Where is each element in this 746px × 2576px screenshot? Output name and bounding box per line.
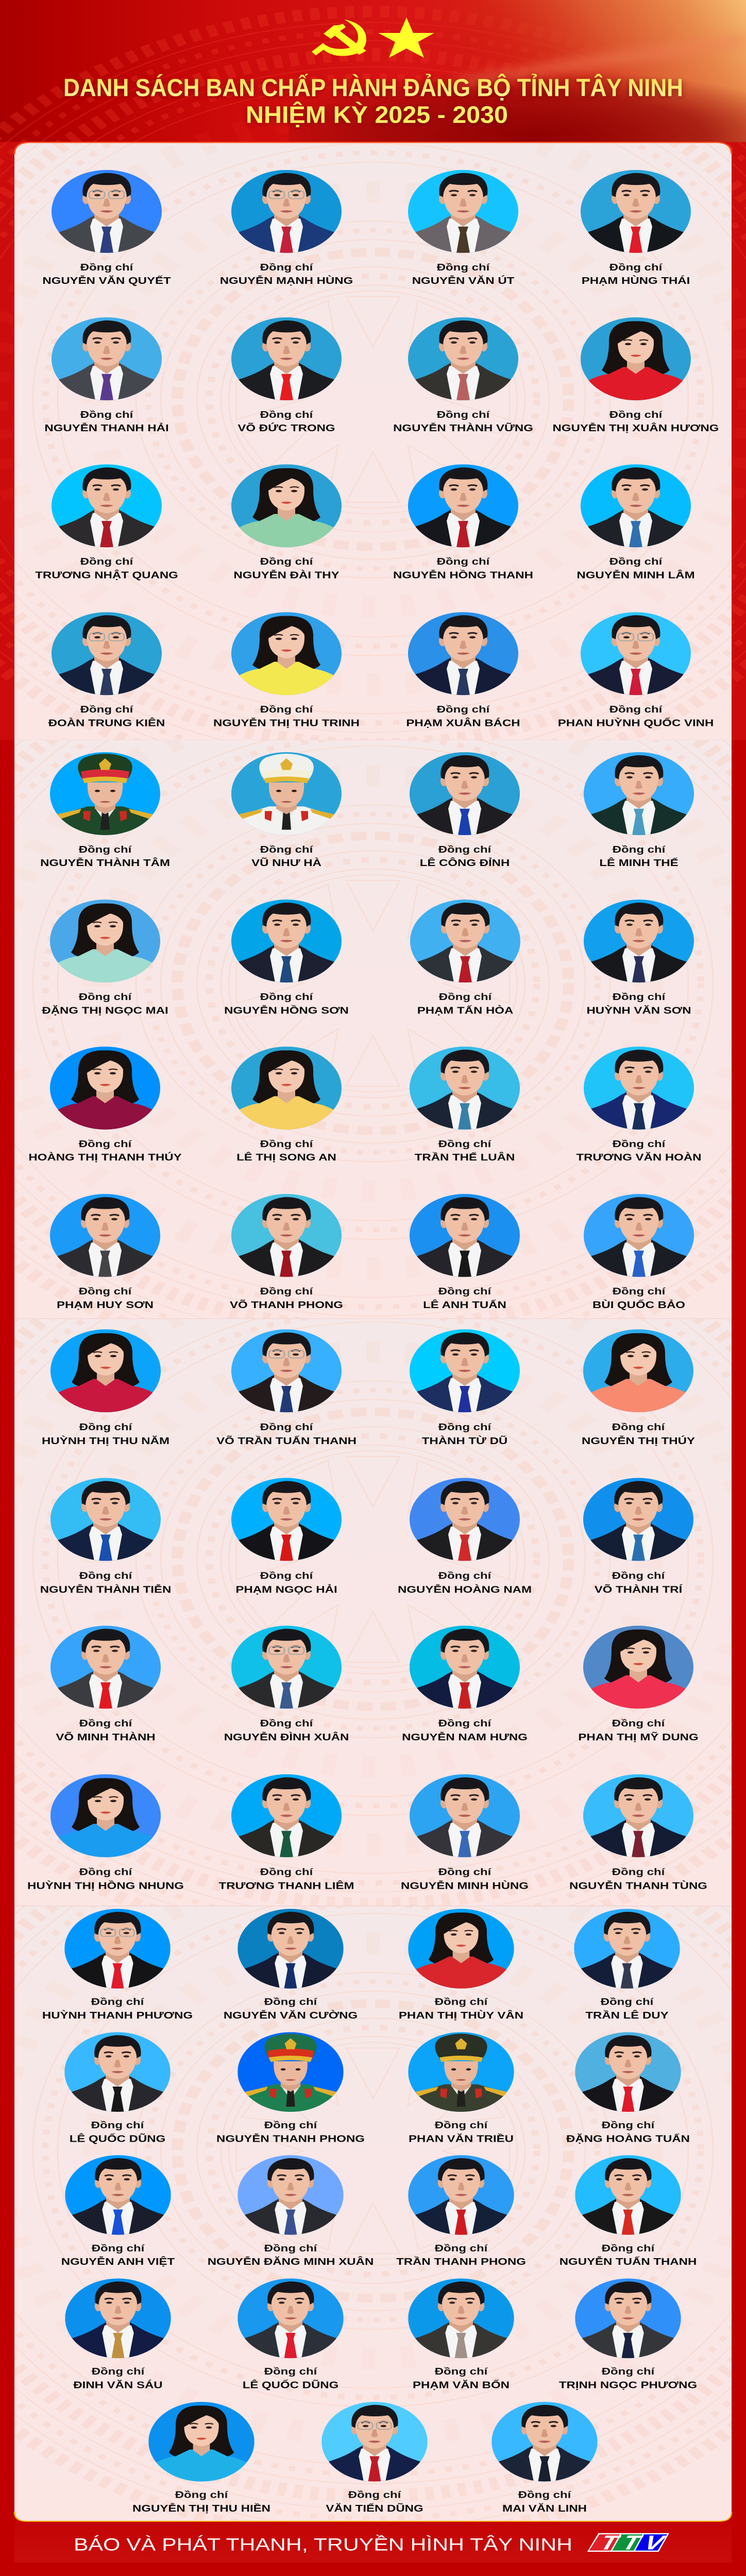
name: VÕ TRẦN TUẤN THANH: [216, 1435, 357, 1446]
name: NGUYỄN THỊ THU HIỀN: [132, 2502, 270, 2514]
name: LÊ QUỐC DŨNG: [243, 2379, 338, 2391]
name: TRƯƠNG THANH LIÊM: [219, 1880, 354, 1891]
photo: [231, 170, 342, 253]
name: ĐINH VĂN SÁU: [73, 2380, 163, 2391]
honorific: Đồng chí: [79, 1570, 133, 1581]
photo: [50, 1329, 161, 1412]
member: Nguyễn Anh Việt: [61, 2155, 175, 2267]
member: Bùi Quốc Bảo: [584, 1194, 694, 1310]
footer band: [14, 2522, 732, 2563]
member: Huỳnh Thị Hồng Nhung: [27, 1774, 184, 1891]
name: VĂN TIẾN DŨNG: [326, 2503, 423, 2514]
name: NGUYỄN HỒNG THANH: [393, 569, 533, 581]
name: VÕ ĐỨC TRONG: [238, 422, 335, 433]
honorific: Đồng chí: [79, 1422, 133, 1432]
header background: [0, 0, 746, 787]
photo: [50, 1046, 160, 1129]
name: PHẠM XUÂN BÁCH: [406, 717, 520, 728]
member: Vũ Như Hà: [231, 752, 342, 868]
name: LÊ ANH TUẤN: [423, 1299, 506, 1310]
name: NGUYỄN THỊ XUÂN HƯƠNG: [553, 422, 719, 433]
footer text: BÁO VÀ PHÁT THANH, TRUYỀN HÌNH TÂY NINH: [74, 2534, 572, 2554]
honorific: Đồng chí: [609, 262, 663, 273]
honorific: Đồng chí: [260, 1867, 314, 1877]
member: Võ Thành Trí: [583, 1478, 693, 1595]
name: TRẦN LÊ DUY: [585, 2010, 669, 2021]
name: NGUYỄN ANH VIỆT: [61, 2256, 175, 2267]
honorific: Đồng chí: [437, 262, 490, 273]
photo: [231, 612, 342, 695]
member: Võ Trần Tuấn Thanh: [216, 1329, 357, 1446]
member: Nguyễn Đình Xuân: [224, 1625, 349, 1743]
honorific: Đồng chí: [438, 1867, 492, 1877]
photo: [231, 1478, 342, 1561]
name: VÕ THÀNH TRÍ: [595, 1584, 683, 1595]
member: Lê Anh Tuấn: [410, 1194, 520, 1310]
member: Nguyễn Thành Tâm: [40, 752, 170, 868]
member: Văn Tiến Dũng: [321, 2402, 428, 2514]
honorific: Đồng chí: [438, 1422, 492, 1432]
honorific: Đồng chí: [260, 1286, 314, 1297]
member: Lê Thị Song An: [231, 1046, 342, 1163]
photo: [50, 900, 160, 982]
photo: [148, 2402, 255, 2482]
name: NGUYỄN VĂN ÚT: [412, 275, 514, 286]
honorific: Đồng chí: [438, 1570, 492, 1581]
photo: [50, 1194, 160, 1277]
honorific: Đồng chí: [518, 2490, 572, 2500]
member: Thành Từ Dũ: [410, 1329, 520, 1446]
member: Đặng Hoàng Tuấn: [566, 2032, 690, 2144]
photo: [491, 2402, 598, 2482]
name: TRƯƠNG VĂN HOÀN: [577, 1152, 701, 1163]
member: Lê Minh Thế: [584, 752, 694, 868]
name: NGUYỄN THÀNH TIỄN: [40, 1584, 171, 1595]
photo: [410, 752, 520, 835]
name: NGUYỄN ĐÌNH XUÂN: [224, 1731, 349, 1743]
honorific: Đồng chí: [91, 2120, 145, 2130]
member: Trương Văn Hoàn: [577, 1046, 701, 1163]
photo: [408, 612, 518, 695]
member: Võ Thanh Phong: [230, 1194, 343, 1310]
photo: [238, 2279, 344, 2358]
honorific: Đồng chí: [79, 1867, 133, 1877]
name: PHAN HUỲNH QUỐC VINH: [558, 717, 714, 728]
honorific: Đồng chí: [609, 704, 663, 715]
honorific: Đồng chí: [264, 2366, 318, 2377]
name: ĐẶNG HOÀNG TUẤN: [566, 2133, 690, 2144]
photo: [231, 317, 342, 400]
member: Nguyễn Thanh Tùng: [569, 1774, 707, 1891]
photo: [64, 1909, 171, 1989]
name: HOÀNG THỊ THANH THÚY: [28, 1152, 182, 1163]
honorific: Đồng chí: [612, 1570, 666, 1581]
honorific: Đồng chí: [264, 2120, 318, 2130]
member: Phạm Ngọc Hải: [231, 1478, 342, 1595]
name: PHAN THỊ MỸ DUNG: [578, 1732, 699, 1743]
member: Nguyễn Thanh Hải: [44, 317, 169, 433]
member: Trần Thế Luân: [410, 1046, 520, 1163]
honorific: Đồng chí: [348, 2490, 402, 2500]
title: NHIỆM KỲ 2025 - 2030: [246, 101, 508, 128]
name: TRƯƠNG NHẬT QUANG: [35, 570, 178, 581]
name: PHẠM TẤN HÒA: [417, 1005, 513, 1016]
photo: [231, 1046, 342, 1129]
member: Nguyễn Thị Xuân Hương: [553, 317, 719, 433]
honorific: Đồng chí: [435, 1997, 488, 2007]
photo: [50, 1625, 161, 1709]
honorific: Đồng chí: [260, 1139, 314, 1149]
name: THÀNH TỪ DŨ: [422, 1435, 507, 1446]
member: Nguyễn Văn Út: [408, 170, 518, 286]
name: ĐẶNG THỊ NGỌC MAI: [42, 1005, 168, 1016]
name: NGUYỄN THANH HẢI: [44, 422, 169, 433]
honorific: Đồng chí: [175, 2490, 229, 2500]
photo: [583, 1774, 693, 1857]
member: Nguyễn Hồng Sơn: [224, 900, 349, 1016]
member: Đặng Thị Ngọc Mai: [42, 900, 168, 1016]
honorific: Đồng chí: [80, 262, 134, 273]
honorific: Đồng chí: [260, 410, 314, 420]
member: Phạm Hùng Thái: [581, 170, 691, 286]
honorific: Đồng chí: [260, 556, 314, 567]
icon: hammer and sickle: [312, 20, 366, 56]
member: Phạm Tấn Hòa: [410, 900, 520, 1016]
name: VÕ MINH THÀNH: [56, 1732, 156, 1743]
honorific: Đồng chí: [92, 2366, 145, 2377]
honorific: Đồng chí: [260, 704, 314, 715]
member: Nguyễn Văn Cường: [224, 1909, 358, 2021]
honorific: Đồng chí: [438, 1718, 492, 1728]
member: Đoàn Trung Kiên: [48, 612, 165, 728]
photo: [583, 1329, 693, 1412]
photo: [231, 752, 342, 835]
photo: [581, 464, 691, 547]
honorific: Đồng chí: [79, 1139, 132, 1149]
name: NGUYỄN THÀNH VỮNG: [393, 422, 533, 433]
photo: [583, 1478, 693, 1561]
photo: [574, 1909, 680, 1989]
name: MAI VĂN LINH: [502, 2503, 587, 2514]
photo: [575, 2279, 681, 2358]
honorific: Đồng chí: [602, 2366, 655, 2377]
photo: [410, 900, 520, 982]
honorific: Đồng chí: [612, 1718, 666, 1728]
name: HUỲNH THANH PHƯƠNG: [42, 2010, 193, 2021]
name: NGUYỄN MINH HÙNG: [401, 1880, 529, 1891]
name: TRẦN THANH PHONG: [396, 2256, 526, 2267]
photo: [583, 1625, 693, 1709]
member: Nguyễn Thành Tiễn: [40, 1478, 171, 1595]
honorific: Đồng chí: [602, 2120, 655, 2130]
honorific: Đồng chí: [260, 844, 314, 855]
member: Lê Quốc Dũng: [64, 2032, 171, 2144]
photo: [65, 2279, 171, 2358]
member: Võ Đức Trong: [231, 317, 342, 433]
name: PHAN THỊ THÙY VÂN: [399, 2010, 523, 2021]
name: PHẠM NGỌC HẢI: [235, 1584, 337, 1595]
member: Phạm Văn Bốn: [408, 2279, 514, 2391]
photo: [52, 317, 162, 400]
honorific: Đồng chí: [264, 1997, 318, 2007]
name: NGUYỄN MẠNH HÙNG: [220, 275, 353, 286]
honorific: Đồng chí: [602, 2243, 655, 2253]
photo: [410, 1625, 520, 1709]
photo: [231, 900, 342, 982]
member: Nguyễn Thị Thu Hiền: [132, 2402, 270, 2514]
photo: [584, 900, 694, 982]
photo: [231, 1329, 342, 1412]
name: BÙI QUỐC BẢO: [592, 1299, 685, 1310]
photo: [584, 752, 694, 835]
honorific: Đồng chí: [80, 556, 134, 567]
honorific: Đồng chí: [79, 844, 132, 855]
honorific: Đồng chí: [613, 992, 666, 1002]
member: Huỳnh Thị Thu Năm: [42, 1329, 169, 1446]
photo: [64, 2032, 171, 2112]
logo: TTV: [587, 2531, 669, 2554]
logo: TTV: V: [641, 2531, 669, 2554]
photo: [52, 612, 162, 695]
member: Nguyễn Đài Thy: [231, 464, 342, 581]
photo: [231, 1625, 342, 1709]
name: NGUYỄN THỊ THU TRINH: [213, 717, 360, 728]
member: Trương Nhật Quang: [35, 464, 178, 581]
name: NGUYỄN VĂN QUYẾT: [42, 275, 171, 286]
photo: [408, 2032, 514, 2112]
photo: [575, 2155, 681, 2235]
name: VŨ NHƯ HÀ: [251, 857, 321, 868]
honorific: Đồng chí: [80, 410, 134, 420]
member: Phạm Huy Sơn: [50, 1194, 160, 1310]
photo: [408, 317, 518, 400]
honorific: Đồng chí: [260, 262, 314, 273]
photo: [581, 170, 691, 253]
honorific: Đồng chí: [91, 1997, 145, 2007]
photo: [408, 170, 518, 253]
member: Huỳnh Thanh Phương: [42, 1909, 193, 2021]
honorific: Đồng chí: [260, 1422, 314, 1432]
honorific: Đồng chí: [438, 844, 492, 855]
member: Nguyễn Tuấn Thanh: [560, 2155, 697, 2267]
member: Trương Thanh Liêm: [219, 1774, 354, 1891]
name: PHẠM HUY SƠN: [57, 1300, 154, 1310]
photo: [410, 1329, 520, 1412]
name: TRỊNH NGỌC PHƯƠNG: [559, 2380, 697, 2391]
member: Nguyễn Thị Thu Trinh: [213, 612, 360, 728]
member: Phạm Xuân Bách: [406, 612, 520, 728]
photo: [581, 317, 691, 400]
photo: [575, 2032, 681, 2112]
member: Phan Huỳnh Quốc Vinh: [558, 612, 714, 728]
member: Đinh Văn Sáu: [65, 2279, 171, 2391]
name: HUỲNH VĂN SƠN: [586, 1005, 691, 1016]
photo: [50, 1478, 161, 1561]
honorific: Đồng chí: [79, 1286, 132, 1297]
member: Nguyễn Đăng Minh Xuân: [208, 2155, 374, 2267]
name: PHẠM HÙNG THÁI: [582, 275, 690, 286]
honorific: Đồng chí: [435, 2366, 488, 2377]
name: NGUYỄN THÀNH TÂM: [40, 857, 170, 868]
photo: [408, 2279, 514, 2358]
honorific: Đồng chí: [435, 2243, 488, 2253]
photo: [584, 1046, 694, 1129]
honorific: Đồng chí: [609, 556, 663, 567]
honorific: Đồng chí: [609, 410, 663, 420]
name: NGUYỄN THANH PHONG: [216, 2133, 365, 2144]
honorific: Đồng chí: [260, 992, 314, 1002]
honorific: Đồng chí: [437, 704, 490, 715]
member: Trần Lê Duy: [574, 1909, 680, 2021]
photo: [238, 1909, 344, 1989]
name: NGUYỄN THANH TÙNG: [569, 1880, 707, 1891]
photo: [410, 1194, 520, 1277]
member: Trần Thanh Phong: [396, 2155, 526, 2267]
member: Lê Quốc Dũng: [238, 2279, 344, 2391]
honorific: Đồng chí: [92, 2243, 145, 2253]
honorific: Đồng chí: [613, 844, 666, 855]
honorific: Đồng chí: [612, 1867, 666, 1877]
name: NGUYỄN HOÀNG NAM: [398, 1584, 532, 1595]
honorific: Đồng chí: [612, 1422, 666, 1432]
member: Nguyễn Mạnh Hùng: [220, 170, 353, 286]
member: Nguyễn Minh Lâm: [577, 464, 695, 581]
photo: [410, 1046, 520, 1129]
member: Phan Văn Triều: [408, 2032, 514, 2144]
member: Nguyễn Hồng Thanh: [393, 464, 533, 581]
member: Nguyễn Thị Thúy: [582, 1329, 695, 1446]
photo: [408, 2155, 514, 2235]
name: NGUYỄN NAM HƯNG: [402, 1731, 528, 1743]
honorific: Đồng chí: [613, 1286, 666, 1297]
name: NGUYỄN THỊ THÚY: [582, 1435, 695, 1446]
name: LÊ CÔNG ĐỈNH: [420, 857, 510, 868]
logo: TTV: T: [597, 2531, 623, 2554]
photo: [50, 1774, 161, 1857]
name: NGUYỄN TUẤN THANH: [560, 2256, 697, 2267]
member: Lê Công Đỉnh: [410, 752, 520, 868]
member: Nguyễn Nam Hưng: [402, 1625, 528, 1743]
honorific: Đồng chí: [439, 992, 493, 1002]
member: Nguyễn Văn Quyết: [42, 170, 171, 286]
photo: [581, 612, 691, 695]
honorific: Đồng chí: [438, 1286, 492, 1297]
icon: star: [378, 18, 434, 58]
honorific: Đồng chí: [79, 1718, 133, 1728]
honorific: Đồng chí: [260, 1570, 314, 1581]
name: NGUYỄN ĐĂNG MINH XUÂN: [208, 2256, 374, 2267]
photo: [50, 752, 160, 835]
honorific: Đồng chí: [264, 2243, 318, 2253]
name: NGUYỄN ĐÀI THY: [233, 569, 340, 581]
member: Nguyễn Thanh Phong: [216, 2032, 365, 2144]
photo: [584, 1194, 694, 1277]
photo: [321, 2402, 428, 2482]
photo: [408, 464, 518, 547]
name: TRẦN THẾ LUÂN: [415, 1152, 515, 1163]
member: Trịnh Ngọc Phương: [559, 2279, 697, 2391]
photo: [52, 170, 162, 253]
honorific: Đồng chí: [613, 1139, 666, 1149]
photo: [231, 464, 342, 547]
name: LÊ THỊ SONG AN: [236, 1152, 336, 1163]
name: PHẠM VĂN BỐN: [413, 2379, 510, 2391]
photo: [238, 2032, 344, 2112]
name: VÕ THANH PHONG: [230, 1299, 343, 1310]
member: Nguyễn Hoàng Nam: [398, 1478, 532, 1595]
photo: [231, 1194, 342, 1277]
honorific: Đồng chí: [260, 1718, 314, 1728]
member: Hoàng Thị Thanh Thúy: [28, 1046, 182, 1163]
member: Nguyễn Minh Hùng: [401, 1774, 529, 1891]
name: LÊ QUỐC DŨNG: [70, 2133, 165, 2144]
title: [63, 73, 683, 128]
photo: [65, 2155, 171, 2235]
name: LÊ MINH THẾ: [599, 857, 679, 868]
name: HUỲNH THỊ THU NĂM: [42, 1435, 169, 1446]
member: Huỳnh Văn Sơn: [584, 900, 694, 1016]
member: Phan Thị Thùy Vân: [399, 1909, 523, 2021]
name: NGUYỄN HỒNG SƠN: [224, 1004, 349, 1016]
member: Nguyễn Thành Vững: [393, 317, 533, 433]
name: HUỲNH THỊ HỒNG NHUNG: [27, 1880, 184, 1891]
name: ĐOÀN TRUNG KIÊN: [48, 717, 165, 728]
honorific: Đồng chí: [601, 1997, 654, 2007]
honorific: Đồng chí: [438, 1139, 492, 1149]
photo: [410, 1478, 520, 1561]
photo: [238, 2155, 344, 2235]
photo: [408, 1909, 514, 1989]
name: NGUYỄN MINH LÂM: [577, 569, 695, 581]
photo: [231, 1774, 342, 1857]
photo: [52, 464, 162, 547]
member: Phan Thị Mỹ Dung: [578, 1625, 699, 1743]
honorific: Đồng chí: [437, 556, 490, 567]
member: Võ Minh Thành: [50, 1625, 161, 1743]
logo: TTV: T: [619, 2531, 645, 2554]
member: Mai Văn Linh: [491, 2402, 598, 2514]
name: PHAN VĂN TRIỀU: [409, 2133, 514, 2144]
photo: [410, 1774, 520, 1857]
name: NGUYỄN VĂN CƯỜNG: [224, 2009, 358, 2021]
honorific: Đồng chí: [437, 410, 490, 420]
honorific: Đồng chí: [435, 2120, 488, 2130]
honorific: Đồng chí: [80, 704, 134, 715]
honorific: Đồng chí: [79, 992, 132, 1002]
